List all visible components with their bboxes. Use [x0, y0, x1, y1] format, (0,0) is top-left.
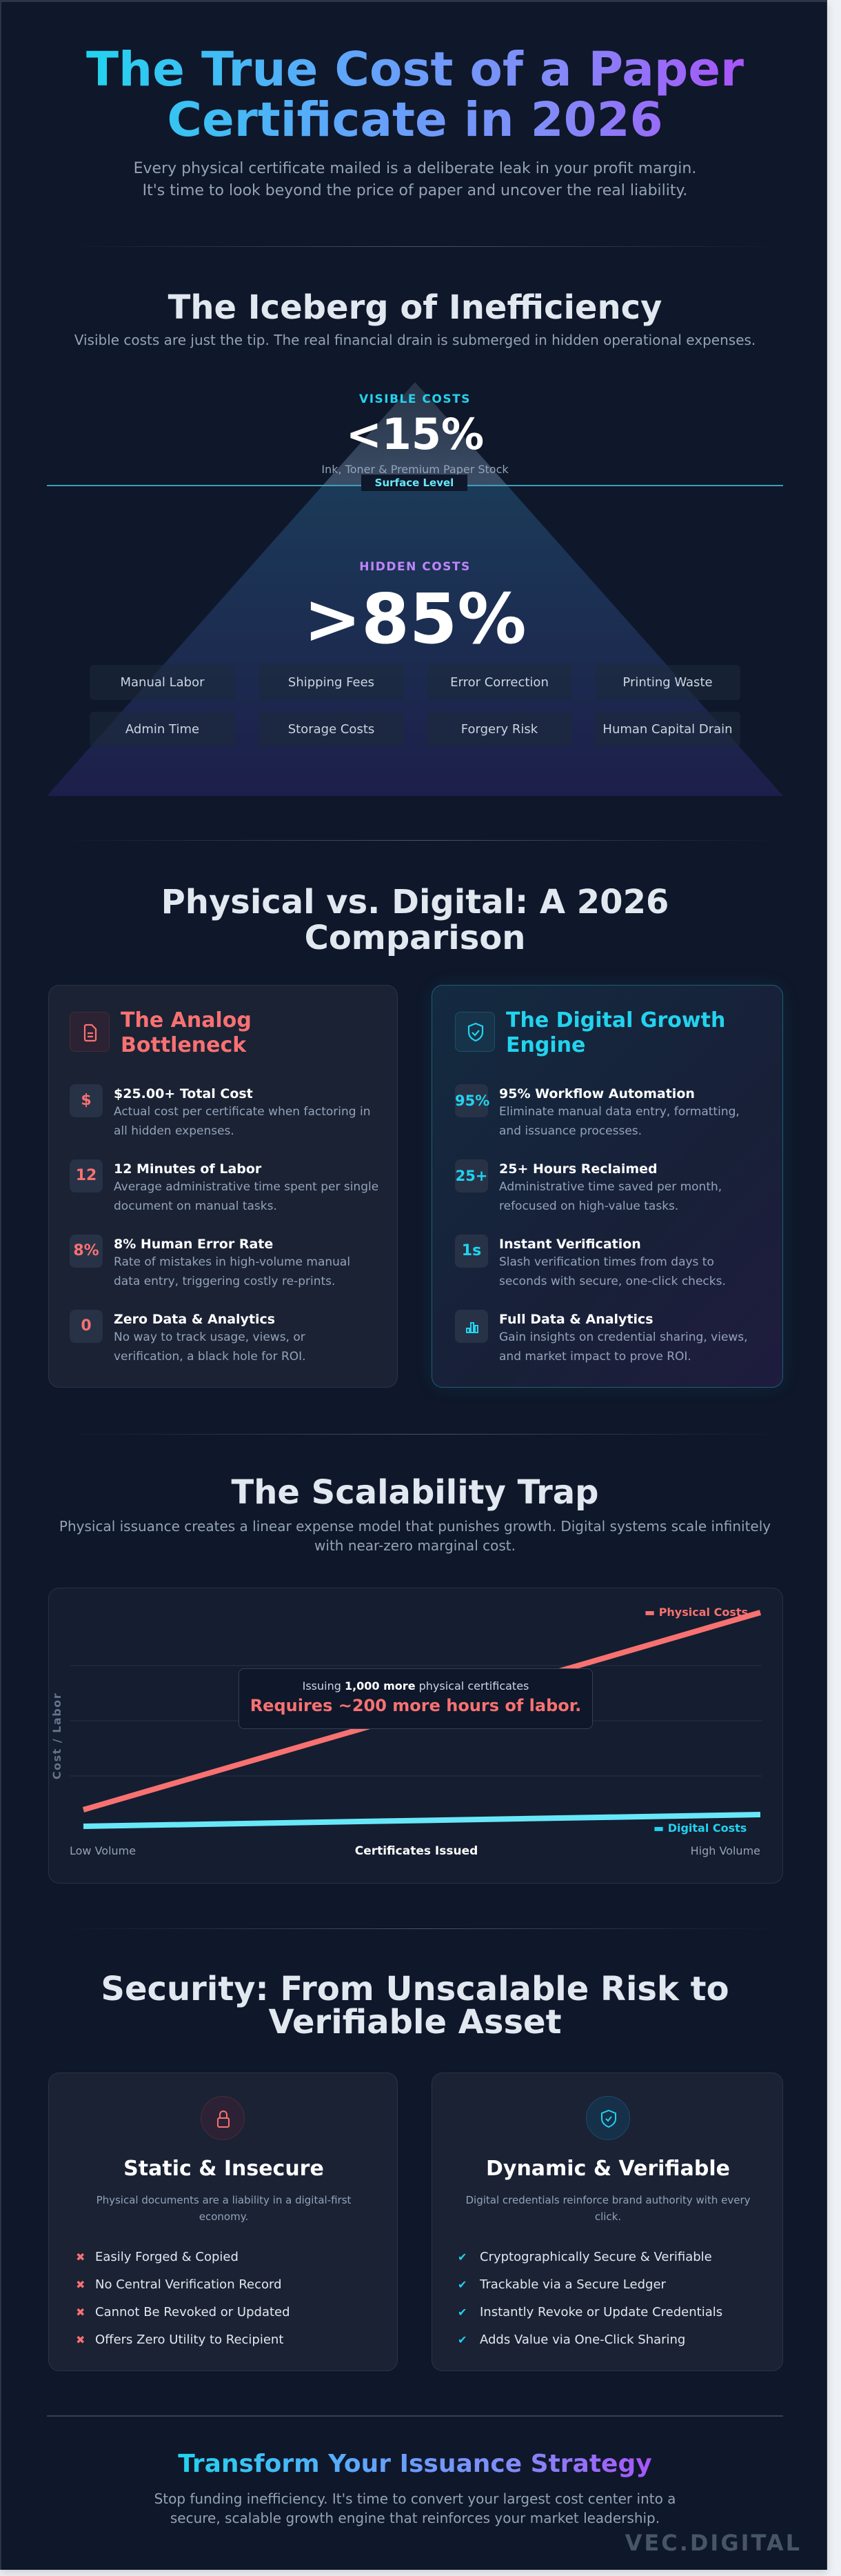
- icon: lock: [201, 2096, 245, 2140]
- footer text: Stop funding inefficiency. It's time to convert your largest cost center into a: [154, 2490, 676, 2507]
- item 1: $: [81, 1092, 92, 1109]
- list: Cannot Be Revoked or Updated: [95, 2305, 290, 2319]
- icon: document: [70, 1012, 110, 1052]
- callout: [239, 1668, 593, 1729]
- item 2: Average administrative time spent per single document on manual tasks.: [114, 1180, 378, 1213]
- item 2: 12: [76, 1167, 97, 1184]
- list: Adds Value via One-Click Sharing: [480, 2333, 685, 2347]
- heading: The Digital Growth: [506, 1008, 725, 1032]
- heading: security: Verifiable Asset: [268, 2003, 562, 2041]
- list: ✖: [76, 2250, 85, 2264]
- panel: static & insecure: [48, 2073, 398, 2371]
- item 4: 0: [81, 1317, 92, 1335]
- item 3: Instant Verification: [499, 1237, 641, 1252]
- item 3: [455, 1235, 726, 1288]
- heading: Engine: [506, 1033, 585, 1057]
- icon: shield check: [586, 2096, 630, 2140]
- heading: The Analog: [121, 1008, 252, 1032]
- x axis labels: Low Volume: [70, 1844, 136, 1857]
- item 2: [70, 1159, 378, 1213]
- legend: physical: ▬ Physical Costs: [645, 1606, 748, 1619]
- list: Easily Forged & Copied: [95, 2250, 239, 2264]
- heading: scalability: The Scalability Trap: [232, 1473, 598, 1512]
- legend: digital: ▬ Digital Costs: [653, 1821, 747, 1835]
- footer heading: Transform Your Issuance Strategy: [178, 2450, 652, 2478]
- item 2: 12 Minutes of Labor: [114, 1161, 261, 1177]
- line chart: High Volume: [691, 1844, 760, 1857]
- iceberg subtitle: Visible costs are just the tip. The real financial drain is submerged in hidden operational expenses.: [74, 332, 756, 348]
- iceberg diagram: [47, 382, 783, 796]
- panel: analog bottleneck: [48, 985, 398, 1388]
- item 2: [455, 1159, 722, 1213]
- heading: Static & Insecure: [123, 2157, 324, 2181]
- list: ✖: [76, 2306, 85, 2319]
- list: ✔: [458, 2250, 467, 2264]
- surface level tag: Surface Level: [375, 477, 454, 489]
- item 1: 95%: [455, 1092, 489, 1109]
- item 4: Zero Data & Analytics: [114, 1312, 275, 1327]
- footer text: [154, 2490, 676, 2526]
- list: ✖: [76, 2278, 85, 2291]
- item 3: 1s: [462, 1242, 481, 1259]
- item 3: 8% Human Error Rate: [114, 1237, 273, 1252]
- panel: dynamic & verifiable: [432, 2073, 783, 2371]
- heading: [506, 1008, 725, 1057]
- item 4: [70, 1310, 306, 1364]
- list: Offers Zero Utility to Recipient: [95, 2333, 283, 2347]
- line chart: Certificates Issued: [355, 1844, 478, 1858]
- subtitle: Every physical certificate mailed is a deliberate leak in your profit margin.: [134, 160, 696, 177]
- line chart: [48, 1588, 783, 1884]
- list: No Central Verification Record: [95, 2277, 282, 2292]
- heading: Bottleneck: [121, 1033, 246, 1057]
- title: [86, 42, 744, 148]
- title: The True Cost of a Paper: [86, 42, 744, 97]
- heading: comparison: Comparison: [305, 919, 525, 957]
- list: Cryptographically Secure & Verifiable: [480, 2250, 712, 2264]
- item 1: Eliminate manual data entry, formatting, and issuance processes.: [499, 1105, 740, 1138]
- item 3: Slash verification times from days to seconds with secure, one-click checks.: [499, 1255, 726, 1288]
- list: ✔: [458, 2306, 467, 2319]
- callout: Issuing 1,000 more physical certificates: [303, 1679, 529, 1693]
- description: Physical documents are a liability in a digital-first economy.: [97, 2194, 351, 2223]
- item 4: Gain insights on credential sharing, views, and market impact to prove ROI.: [499, 1330, 748, 1364]
- item 4: [455, 1310, 748, 1364]
- item 4: No way to track usage, views, or verification, a black hole for ROI.: [114, 1330, 306, 1364]
- list: Trackable via a Secure Ledger: [480, 2277, 666, 2292]
- heading: comparison: Physical vs. Digital: A 2026: [161, 883, 669, 921]
- item 2: 25+ Hours Reclaimed: [499, 1161, 658, 1177]
- list: [76, 2250, 290, 2347]
- hidden percentage: >85%: [303, 579, 527, 659]
- hidden cost boxes: Manual Labor: [120, 675, 205, 690]
- item 1: 95% Workflow Automation: [499, 1086, 695, 1101]
- scalability subtitle: Physical issuance creates a linear expense model that punishes growth. Digital systems scale infinitely: [59, 1518, 771, 1535]
- heading: comparison: [161, 883, 669, 957]
- list: ✔: [458, 2333, 467, 2346]
- list: Instantly Revoke or Update Credentials: [480, 2305, 722, 2319]
- description: Digital credentials reinforce brand authority with every click.: [465, 2194, 751, 2223]
- hidden cost boxes: Error Correction: [450, 675, 549, 690]
- item 3: [70, 1235, 350, 1288]
- heading: [121, 1008, 252, 1057]
- heading: security: Security: From Unscalable Risk to: [101, 1970, 729, 2008]
- item 2: Administrative time saved per month, refocused on high-value tasks.: [499, 1180, 722, 1213]
- visible costs label: VISIBLE COSTS: [359, 392, 471, 406]
- list: ✖: [76, 2333, 85, 2346]
- y axis label: Cost / Labor: [50, 1693, 63, 1779]
- hidden cost boxes: Forgery Risk: [461, 722, 538, 737]
- heading: iceberg: The Iceberg of Inefficiency: [168, 288, 662, 327]
- hidden cost boxes: Admin Time: [125, 722, 199, 737]
- surface level tag: [361, 475, 467, 491]
- visible description: Ink, Toner & Premium Paper Stock: [321, 463, 509, 476]
- item 1: $25.00+ Total Cost: [114, 1086, 253, 1101]
- hidden cost boxes: Printing Waste: [622, 675, 713, 690]
- item 4: Full Data & Analytics: [499, 1312, 653, 1327]
- heading: Dynamic & Verifiable: [486, 2157, 730, 2181]
- hidden costs label: HIDDEN COSTS: [359, 560, 471, 574]
- panel: digital growth engine: [432, 985, 783, 1388]
- subtitle: [134, 160, 696, 199]
- hidden cost boxes: [90, 665, 740, 747]
- callout: Requires ~200 more hours of labor.: [250, 1696, 581, 1715]
- list: ✔: [458, 2278, 467, 2291]
- item 3: Rate of mistakes in high-volume manual data entry, triggering costly re-prints.: [114, 1255, 350, 1288]
- scalability subtitle: with near-zero marginal cost.: [314, 1537, 516, 1554]
- item 1: Actual cost per certificate when factoring in all hidden expenses.: [114, 1105, 370, 1138]
- title: Certificate in 2026: [167, 92, 663, 148]
- hidden cost boxes: Human Capital Drain: [602, 722, 733, 737]
- list: [458, 2250, 722, 2347]
- visible percentage: <15%: [346, 409, 484, 459]
- item 1: [455, 1084, 740, 1138]
- hidden cost boxes: Shipping Fees: [288, 675, 374, 690]
- item 2: 25+: [456, 1168, 487, 1184]
- footer text: secure, scalable growth engine that reinforces your market leadership.: [170, 2510, 660, 2526]
- heading: security: [101, 1970, 729, 2041]
- brand mark: VEC.DIGITAL: [625, 2530, 802, 2556]
- subtitle: It's time to look beyond the price of paper and uncover the real liability.: [143, 182, 687, 199]
- item 3: 8%: [73, 1242, 99, 1259]
- item 1: [70, 1084, 370, 1138]
- scalability subtitle: [59, 1518, 771, 1554]
- icon: shield: [455, 1012, 495, 1052]
- hidden cost boxes: Storage Costs: [288, 722, 374, 737]
